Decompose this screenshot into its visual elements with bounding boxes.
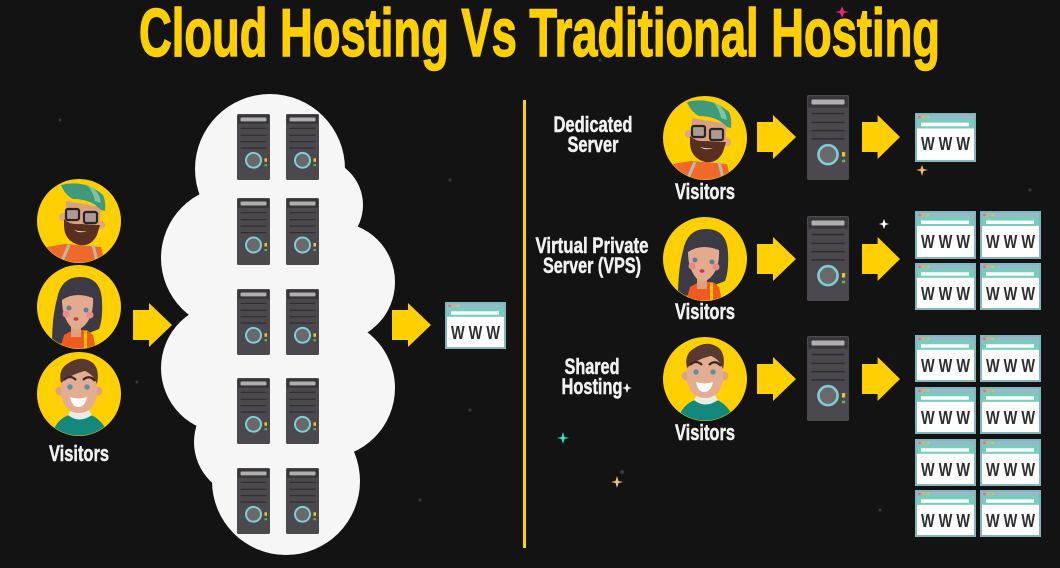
website windows: WWW [986, 232, 1039, 252]
icon: visitor man [663, 96, 747, 180]
arrow [862, 357, 900, 401]
panel: shared hosting [562, 335, 1041, 537]
panel: virtual private server [536, 211, 1041, 324]
panel: cloud hosting [37, 94, 506, 555]
website windows: WWW [921, 408, 974, 428]
website window: WWW [921, 134, 974, 154]
label: visitors: Visitors [675, 299, 735, 324]
label: dedicated server [554, 112, 632, 157]
website windows: WWW [986, 284, 1039, 304]
website windows: WWW [986, 511, 1039, 531]
icon: visitor guy [37, 352, 121, 436]
website windows: WWW [986, 460, 1039, 480]
label: dedicated server: Dedicated [554, 112, 632, 137]
website window [915, 113, 976, 162]
icon: server [807, 95, 849, 180]
website windows: WWW [921, 284, 974, 304]
label: visitors: Visitors [675, 179, 735, 204]
website windows: WWW [921, 511, 974, 531]
website window [445, 302, 506, 349]
label: vps [536, 233, 648, 278]
label: shared hosting: Shared [564, 354, 620, 379]
label: shared hosting: Hosting [562, 374, 622, 399]
website window: WWW [451, 323, 504, 343]
icon: server [807, 336, 849, 421]
website windows: WWW [921, 232, 974, 252]
website windows [915, 211, 1041, 310]
label: vps: Virtual Private [536, 233, 648, 258]
arrow: cloud to website [392, 303, 431, 347]
icon: visitor guy [663, 337, 747, 421]
label: dedicated server: Server [568, 132, 619, 157]
website windows: WWW [921, 460, 974, 480]
label: shared hosting [562, 354, 622, 399]
arrow [757, 357, 796, 401]
website windows: WWW [921, 356, 974, 376]
arrow [757, 115, 796, 159]
website windows [915, 335, 1041, 537]
icon: visitor woman [37, 265, 121, 349]
divider [523, 100, 526, 548]
label: vps: Server (VPS) [543, 253, 641, 278]
arrow [862, 237, 900, 281]
arrow [862, 115, 900, 159]
icon: visitor man [37, 179, 121, 263]
icon: server [807, 216, 849, 301]
website windows: WWW [986, 408, 1039, 428]
server farm [237, 114, 319, 534]
label: visitors: Visitors [49, 441, 109, 466]
website windows: WWW [986, 356, 1039, 376]
icon: cloud [161, 94, 395, 555]
icon: visitor woman [663, 217, 747, 301]
label: visitors: Visitors [675, 420, 735, 445]
arrow: visitors to cloud [133, 303, 172, 347]
arrow [757, 237, 796, 281]
panel: dedicated server [554, 95, 976, 204]
